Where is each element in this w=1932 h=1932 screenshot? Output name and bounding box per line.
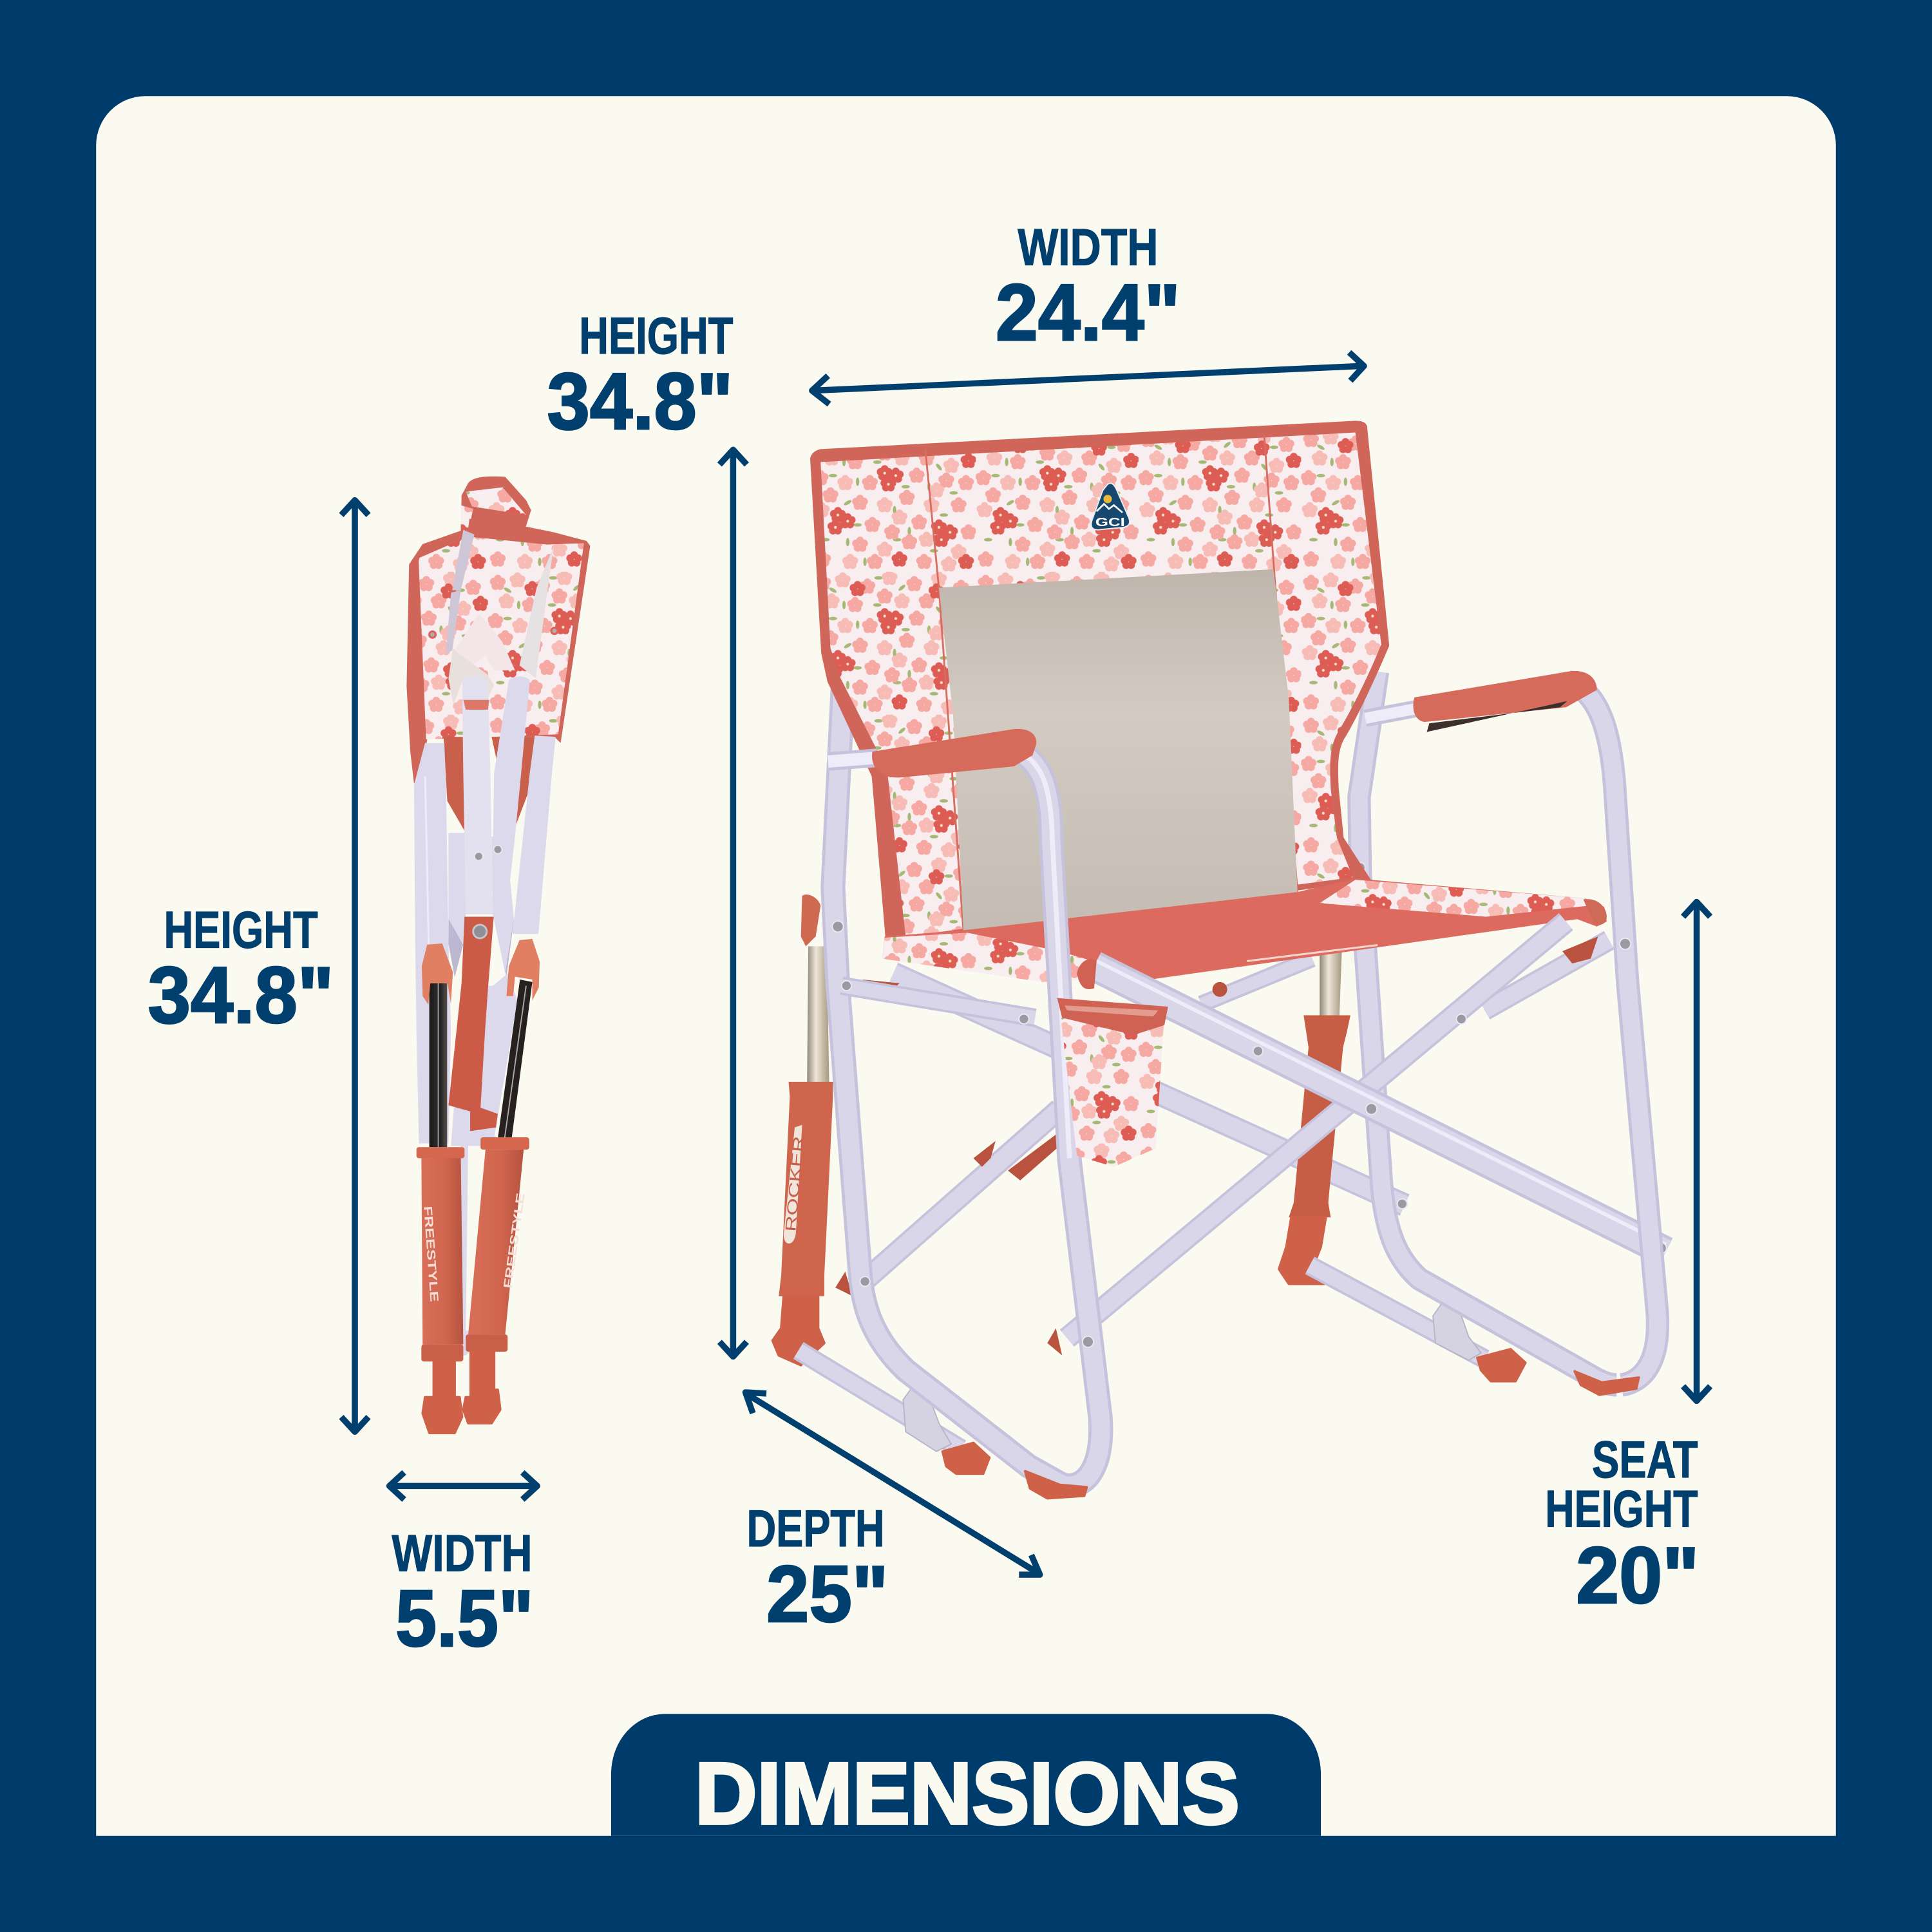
rear struts <box>864 959 1405 1282</box>
arrow: folded width <box>390 1472 537 1499</box>
label: folded width <box>392 1524 533 1663</box>
label: unfolded width: WIDTH <box>1018 218 1158 276</box>
arrow: seat height <box>1683 902 1710 1401</box>
label: unfolded height: 34.8" <box>547 357 733 446</box>
folded coral folds behind frame <box>415 737 535 833</box>
gci logo: GCI <box>1095 516 1125 529</box>
label: folded width: 5.5" <box>395 1574 533 1663</box>
folded fabric <box>406 477 590 784</box>
label: depth: DEPTH <box>746 1500 885 1558</box>
label: unfolded width: 24.4" <box>996 268 1180 357</box>
seat <box>882 878 1607 982</box>
right runner <box>1310 1265 1526 1381</box>
left side frame loop <box>828 749 1101 1499</box>
arrow: height <box>719 450 746 1357</box>
right rocker piston <box>1279 951 1350 1284</box>
rear frame posts <box>833 672 1616 1385</box>
open chair <box>773 421 1667 1499</box>
label: seat height: 20" <box>1576 1531 1699 1620</box>
title tab: dimensions <box>611 1714 1321 1842</box>
label: folded height <box>148 901 334 1040</box>
arrow: width <box>812 352 1364 404</box>
left rocker piston <box>773 895 833 1365</box>
label: folded width: WIDTH <box>392 1524 533 1582</box>
chair back fabric <box>811 421 1388 946</box>
cross bars <box>1019 922 1667 1338</box>
arrow: folded height <box>341 500 368 1432</box>
cup holder <box>1057 998 1168 1167</box>
label: unfolded height: HEIGHT <box>579 307 733 365</box>
label: unfolded width <box>996 218 1180 357</box>
small coral tabs <box>835 936 1598 1356</box>
freestyle labels: FREESTYLE <box>501 1192 527 1289</box>
label: seat height: HEIGHT <box>1545 1481 1698 1539</box>
label: folded height: 34.8" <box>148 951 334 1040</box>
label: depth <box>746 1500 888 1639</box>
folded chair <box>406 477 590 1433</box>
title tab: dimensions: DIMENSIONS <box>695 1745 1240 1842</box>
label: folded height: HEIGHT <box>164 901 318 959</box>
label: depth: 25" <box>766 1549 888 1639</box>
right front frame loop <box>1365 681 1658 1395</box>
strut joint bar <box>842 986 1035 1018</box>
label: seat height: SEAT <box>1592 1431 1698 1489</box>
label: seat height <box>1545 1431 1699 1620</box>
freestyle labels <box>421 1192 527 1302</box>
folded strap <box>448 916 498 1131</box>
left rocker piston: ROCKER <box>782 1135 807 1233</box>
armrest pads <box>872 671 1597 777</box>
left runner <box>799 1350 989 1473</box>
gci logo <box>1091 483 1130 530</box>
label: unfolded height <box>547 307 733 446</box>
freestyle labels: FREESTYLE <box>421 1206 441 1302</box>
folded frame tubes <box>414 676 556 1356</box>
folded rods and cylinders <box>417 939 540 1433</box>
arrow: depth <box>746 1392 1040 1575</box>
